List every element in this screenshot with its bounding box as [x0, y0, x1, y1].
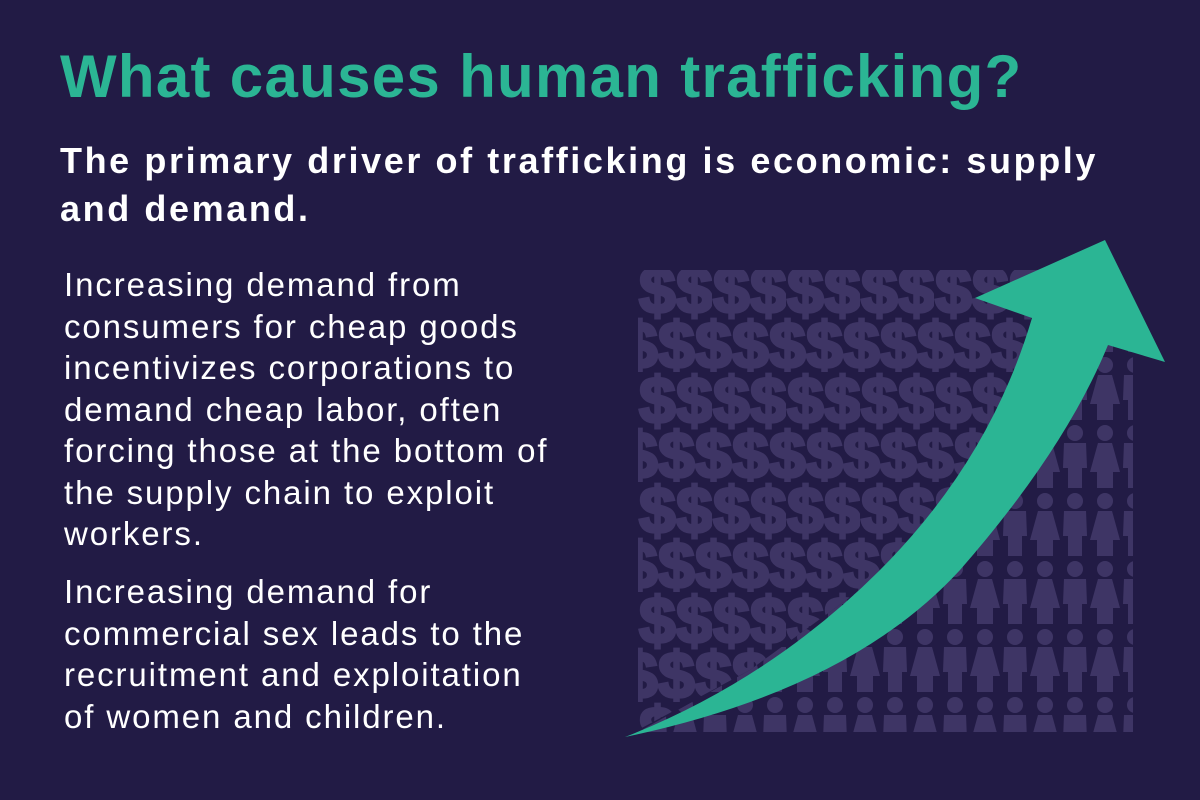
text block: consumer demand: [64, 266, 548, 552]
subtitle: The primary driver of trafficking is economic: supply: [60, 140, 1098, 181]
text block: commercial sex demand: commercial sex leads to the: [64, 614, 524, 652]
text block: commercial sex demand: recruitment and exploitation: [64, 656, 523, 693]
text block: consumer demand: the supply chain to exploit: [64, 474, 495, 510]
title: What causes human trafficking?: [60, 43, 1022, 110]
text block: commercial sex demand: of women and children.: [64, 698, 447, 734]
text block: consumer demand: consumers for cheap goods: [64, 308, 519, 344]
subtitle: and demand.: [60, 188, 311, 229]
text block: consumer demand: Increasing demand from: [64, 266, 462, 303]
subtitle: [60, 140, 1098, 229]
chart graphic: [625, 240, 1165, 737]
text block: consumer demand: workers.: [64, 515, 204, 552]
text block: commercial sex demand: [64, 573, 524, 734]
text block: commercial sex demand: Increasing demand for: [64, 573, 432, 610]
text block: consumer demand: incentivizes corporations to: [64, 349, 515, 386]
pattern: dollar signs: [638, 270, 1038, 728]
pattern: people figures: [644, 345, 1133, 732]
text block: consumer demand: demand cheap labor, often: [64, 390, 502, 428]
text block: consumer demand: forcing those at the bottom of: [64, 432, 548, 469]
arrow: rising green curve: [625, 240, 1165, 737]
